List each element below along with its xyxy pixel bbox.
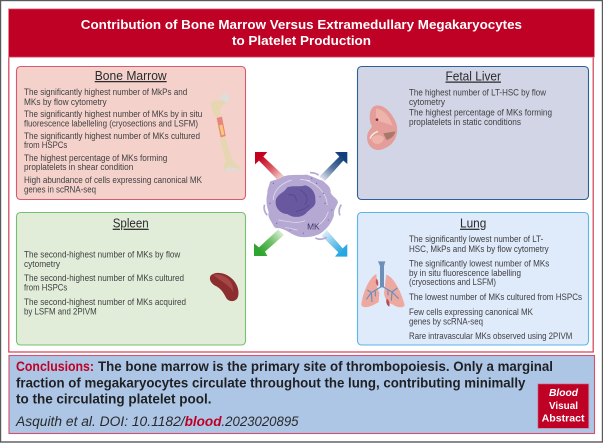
text: conclusions: The bone marrow is the primary site of thrombopoiesis. Only a marginal — [98, 359, 553, 374]
text: lung findings: by in situ fluorescence labelling — [409, 268, 521, 278]
text: conclusions: Conclusions: — [16, 359, 94, 374]
heading: bone marrow: Bone Marrow — [95, 69, 168, 83]
text: spleen findings: The second-highest number of MKs acquired — [24, 297, 186, 307]
text: spleen findings: from HSPCs — [24, 282, 68, 292]
text: spleen findings: The second-highest number of MKs cultured — [24, 273, 184, 283]
text: citation: Asquith et al. DOI: 10.1182/ — [15, 414, 186, 429]
text: spleen findings: by LSFM and 2PIVM — [24, 306, 97, 316]
panel: fetal liver — [358, 66, 588, 200]
cell: megakaryocyte body — [266, 175, 338, 237]
text: fetal liver findings: proplatelets in static conditions — [409, 117, 522, 127]
text: lung findings: Few cells expressing canonical MK — [409, 307, 533, 317]
text: lung findings: HSC, MkPs and MKs by flow cytometry — [409, 244, 549, 254]
text: citation — [15, 414, 299, 429]
text: bone marrow findings: genes in scRNA-seq — [24, 184, 96, 194]
text: bone marrow findings: The highest percentage of MKs forming — [24, 153, 167, 163]
panel: bone marrow — [16, 66, 246, 200]
text: spleen findings: cytometry — [24, 259, 61, 269]
title banner: to Platelet Production — [232, 33, 371, 48]
text: citation: .2023020895 — [222, 414, 299, 429]
text: lung findings: The significantly lowest number of LT- — [409, 234, 543, 244]
text: lung findings: genes by scRNA-seq — [409, 316, 483, 326]
text: bone marrow findings: The significantly highest number of MkPs and — [24, 87, 187, 97]
text: bone marrow findings: MKs by flow cytometry — [24, 97, 107, 107]
cell: nucleus — [276, 185, 315, 217]
heading: spleen: Spleen — [113, 217, 149, 231]
text: bone marrow findings: The significantly highest number of MKs cultured — [24, 131, 200, 141]
icon: spleen organ — [210, 273, 239, 301]
text: conclusions: to the circulating platelet pool. — [16, 392, 212, 407]
text: bone marrow findings: The significantly highest number of MKs by in situ — [24, 109, 202, 119]
text: bone marrow findings: High abundance of cells expressing canonical MK — [24, 175, 202, 185]
text: fetal liver findings — [409, 87, 552, 127]
text: lung findings: Rare intravascular MKs observed using 2PIVM — [409, 331, 572, 341]
panel: spleen — [16, 212, 246, 345]
label: MK: MK — [307, 222, 320, 232]
title banner: Contribution of Bone Marrow Versus Extramedullary Megakaryocytes — [81, 17, 522, 32]
text: fetal liver findings: The highest number of LT-HSC by flow — [409, 87, 547, 97]
text: bone marrow findings: from HSPCs — [24, 140, 68, 150]
heading: fetal liver: Fetal Liver — [446, 70, 501, 84]
icon: lungs — [361, 261, 405, 307]
text: lung findings: The significantly lowest number of MKs — [409, 258, 550, 268]
text: lung findings — [409, 234, 583, 341]
heading: lung: Lung — [460, 217, 486, 231]
arrow: to bone marrow — [255, 152, 284, 181]
text: lung findings: (cryosections and LSFM) — [409, 277, 496, 287]
text: bone marrow findings: fluorescence labelleling (cryosections and LSFM) — [24, 118, 198, 128]
text: fetal liver findings: cytometry — [409, 97, 446, 107]
badge: Blood Visual Abstract: Blood — [549, 388, 579, 399]
text: conclusions: fraction of megakaryocytes circulate throughout the lung, contributing minimally — [16, 375, 526, 390]
arrow: to lung — [322, 230, 347, 257]
text: fetal liver findings: The highest percentage of MKs forming — [409, 108, 552, 118]
text: citation: blood — [185, 414, 222, 429]
title banner — [8, 9, 594, 57]
text: bone marrow findings — [24, 87, 202, 194]
text: lung findings: The lowest number of MKs cultured from HSPCs — [409, 292, 583, 302]
text: bone marrow findings: proplatelets in shear condition — [24, 162, 133, 172]
badge: Blood Visual Abstract — [538, 384, 589, 428]
arrow: to spleen — [254, 229, 284, 256]
badge: Blood Visual Abstract: Visual — [549, 401, 578, 412]
main content frame — [9, 57, 593, 352]
arrow: to fetal liver — [319, 152, 347, 181]
badge: Blood Visual Abstract: Abstract — [542, 414, 585, 425]
panel: conclusions — [9, 356, 594, 434]
icon: embryo — [367, 105, 397, 150]
graphic: central megakaryocyte with arrows — [254, 152, 347, 257]
icon: femur bone — [211, 94, 240, 171]
text: spleen findings: The second-highest number of MKs by flow — [24, 250, 181, 260]
text: conclusions — [16, 359, 553, 407]
panel: lung — [358, 212, 588, 345]
text: spleen findings — [24, 250, 186, 316]
